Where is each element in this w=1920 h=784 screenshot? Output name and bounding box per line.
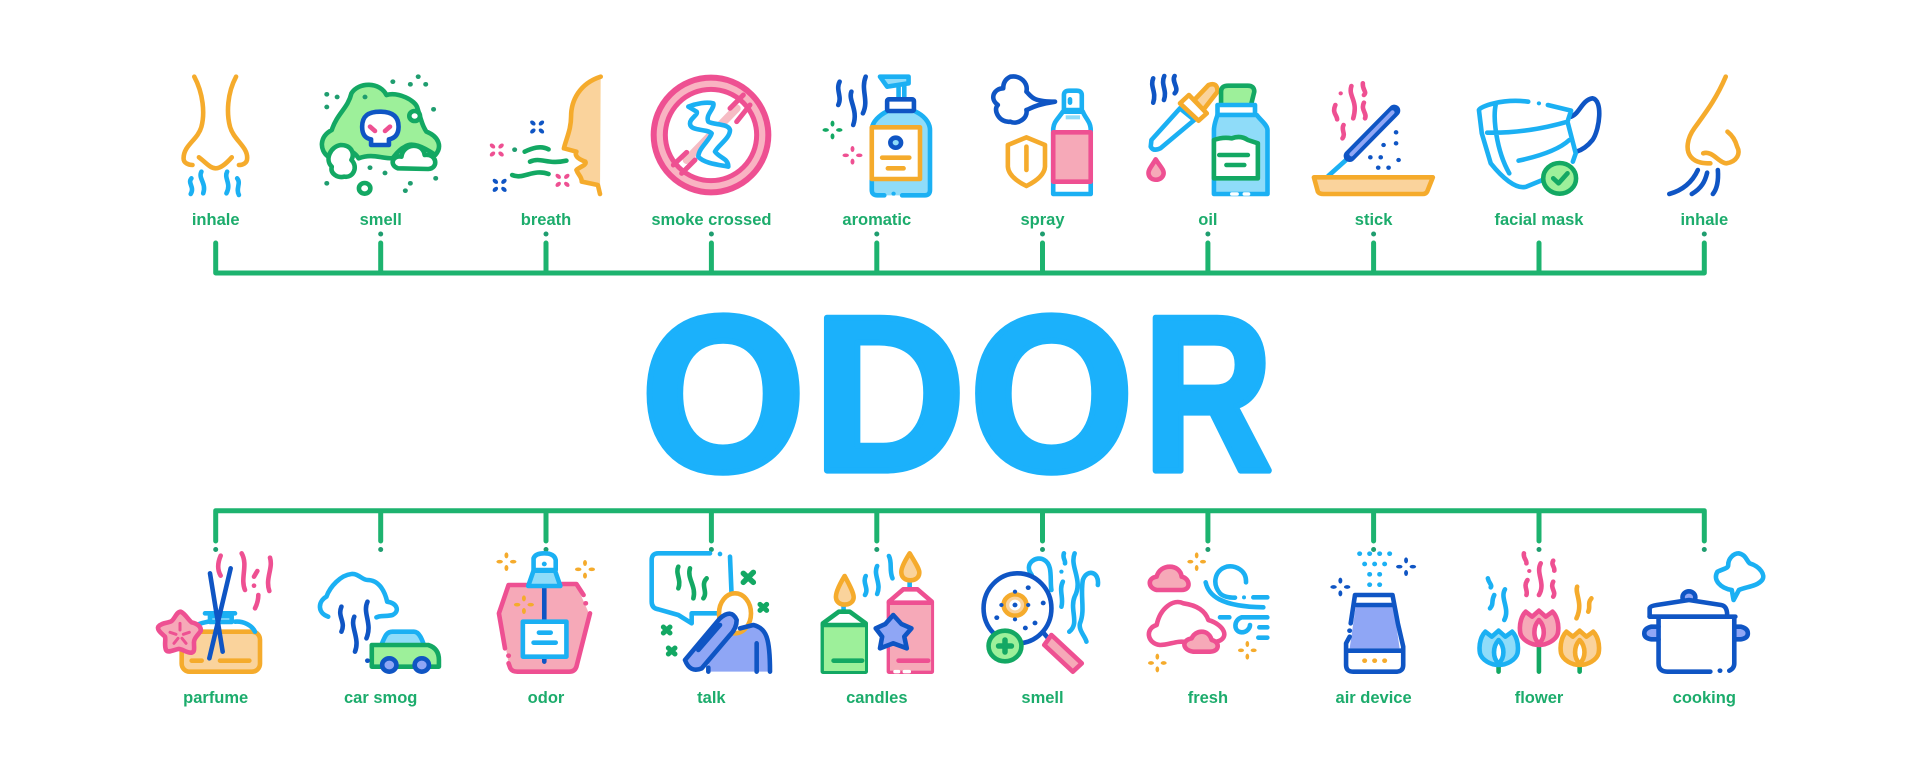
icon: three tulips [1480,553,1599,672]
panel: fresh [1148,552,1267,707]
panel: spray [993,76,1091,229]
icon: car with smog cloud [320,574,439,672]
icon: cooking pot with steam [1644,553,1763,673]
title: ODO [641,270,1134,518]
icon: incense stick [1314,83,1433,194]
panel: breath [489,77,601,229]
icon: nose side [1669,77,1738,194]
panel: parfume [158,553,271,707]
panel: air device [1330,551,1416,707]
panel: smoke crossed [651,78,771,229]
label: cooking: cooking [1673,689,1736,707]
panel: candles [823,553,932,707]
icon: magnifier with wavy smell [984,553,1098,672]
label: flower: flower [1515,689,1564,707]
label: spray: spray [1020,211,1065,229]
label: car smog: car smog [344,689,417,707]
label: candles: candles [846,689,908,707]
label: odor: odor [528,689,565,707]
icon: reed diffuser with flower [158,553,271,672]
label: aromatic: aromatic [842,211,911,229]
panel: inhale side [1669,77,1738,229]
icon: facial mask with check [1479,98,1599,194]
label: facial mask: facial mask [1495,211,1584,229]
panel: flower [1480,553,1599,707]
label: stick: stick [1355,211,1393,229]
icon: spray bottle with shield [993,76,1091,194]
label: inhale: inhale [1680,211,1728,229]
label: smell: smell [1021,689,1064,707]
panel: odor [496,552,595,707]
icon: dropper [1148,76,1217,180]
label: parfume: parfume [183,689,248,707]
label: oil: oil [1198,211,1218,229]
label: smell: smell [360,211,402,229]
panel: smell magnifier [984,553,1098,707]
title: R [1143,270,1273,518]
icon: crossed smoke sign [654,78,768,192]
icon: clouds and wind [1148,552,1267,672]
icon: two candles with star [823,553,932,672]
label: fresh: fresh [1188,689,1228,707]
icon: person talking with speech bubble [652,552,770,672]
icon: nose front [184,77,247,195]
icon: toxic cloud with skull [322,74,439,194]
panel: aromatic [822,77,930,229]
panel: facial mask [1479,98,1599,229]
top connector [216,232,1707,273]
panel: smell cloud [322,74,439,229]
panel: talk [652,552,770,707]
label: air device: air device [1336,689,1412,707]
icon: perfume bottle [496,552,595,672]
icon: face breathing out [489,77,601,194]
icon: oil bottle [1214,86,1267,194]
bottom connector [213,511,1707,552]
panel: cooking [1644,553,1763,707]
label: inhale: inhale [192,211,240,229]
label: talk: talk [697,689,726,707]
panel: oil [1148,76,1267,229]
icon: air humidifier [1330,551,1416,672]
label: smoke crossed: smoke crossed [651,211,771,229]
panel: inhale front [184,77,247,229]
label: breath: breath [521,211,571,229]
panel: stick [1314,83,1433,229]
panel: car smog [320,574,439,707]
icon: pump bottle [822,77,930,196]
